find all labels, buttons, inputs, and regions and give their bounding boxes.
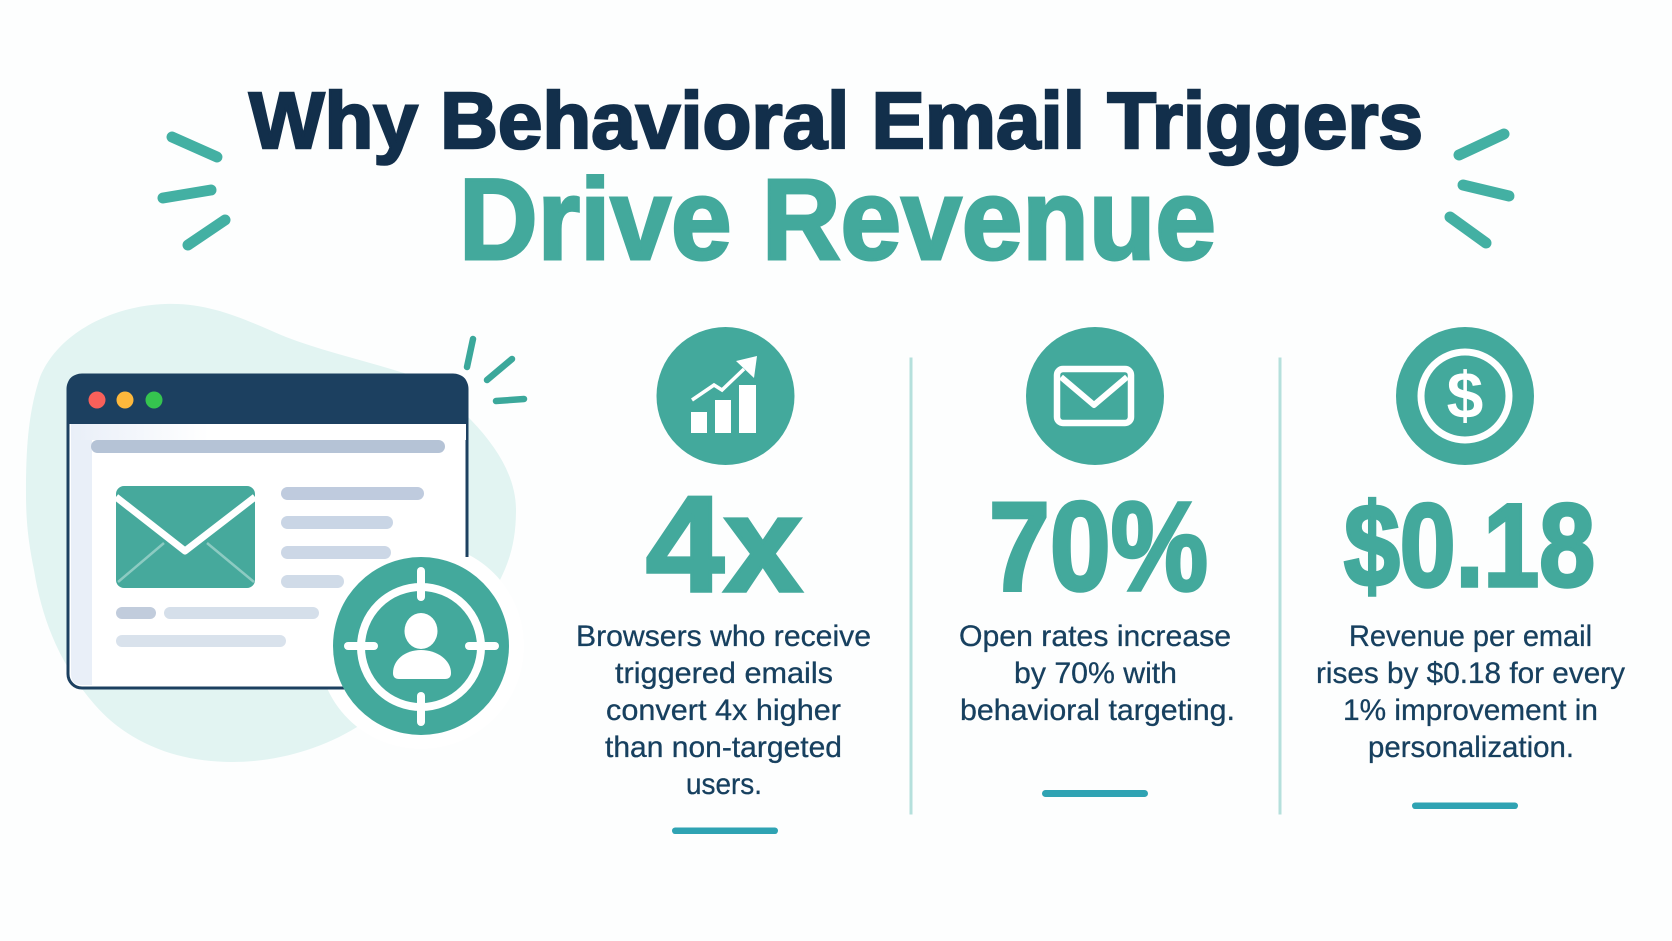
icon: dollar coin bbox=[1396, 327, 1534, 465]
accent underline bbox=[672, 828, 778, 834]
window control dots bbox=[88, 392, 162, 408]
icon: envelope bbox=[116, 486, 255, 588]
description: Open rates increase bbox=[959, 620, 1231, 653]
icon: envelope bbox=[1026, 327, 1164, 465]
accent underline bbox=[1042, 790, 1148, 797]
illustration: browser window with email and target bbox=[26, 304, 524, 762]
text placeholder lines bbox=[116, 487, 424, 647]
title bbox=[249, 76, 1423, 284]
title line 2: Drive Revenue bbox=[459, 156, 1216, 284]
divider bbox=[1278, 358, 1282, 814]
icon: growth chart bbox=[656, 327, 794, 465]
description: than non-targeted bbox=[605, 731, 842, 764]
icon: window sparks bbox=[467, 339, 524, 401]
icon: dollar coin: $ bbox=[1447, 358, 1483, 432]
background blob bbox=[26, 304, 516, 762]
icon: right title sparks bbox=[1450, 134, 1509, 243]
stat: 4x: 4x bbox=[646, 468, 802, 620]
description bbox=[959, 620, 1235, 727]
divider bbox=[910, 358, 912, 814]
description: Revenue per email bbox=[1349, 620, 1592, 653]
panel: conversion stat bbox=[576, 327, 871, 834]
description: rises by $0.18 for every bbox=[1316, 657, 1625, 690]
browser window bbox=[67, 374, 468, 688]
stat: $0.18: $0.18 bbox=[1344, 480, 1595, 612]
description: behavioral targeting. bbox=[960, 694, 1235, 727]
description: convert 4x higher bbox=[606, 694, 841, 727]
description bbox=[576, 620, 871, 801]
title line 1: Why Behavioral Email Triggers bbox=[249, 76, 1423, 165]
icon: left title sparks bbox=[163, 137, 225, 245]
description: users. bbox=[686, 768, 762, 801]
description: 1% improvement in bbox=[1343, 694, 1598, 727]
address bar bbox=[91, 440, 445, 453]
stat: 70%: 70% bbox=[989, 476, 1208, 617]
description: personalization. bbox=[1368, 731, 1574, 764]
badge halo bbox=[318, 543, 524, 749]
description: triggered emails bbox=[615, 657, 833, 690]
panel: open rate stat bbox=[959, 327, 1235, 797]
accent underline bbox=[1412, 802, 1518, 809]
description bbox=[1316, 620, 1625, 764]
description: Browsers who receive bbox=[576, 620, 871, 653]
description: by 70% with bbox=[1014, 657, 1177, 690]
icon: user target badge bbox=[333, 557, 509, 735]
panel: revenue stat bbox=[1316, 327, 1625, 809]
